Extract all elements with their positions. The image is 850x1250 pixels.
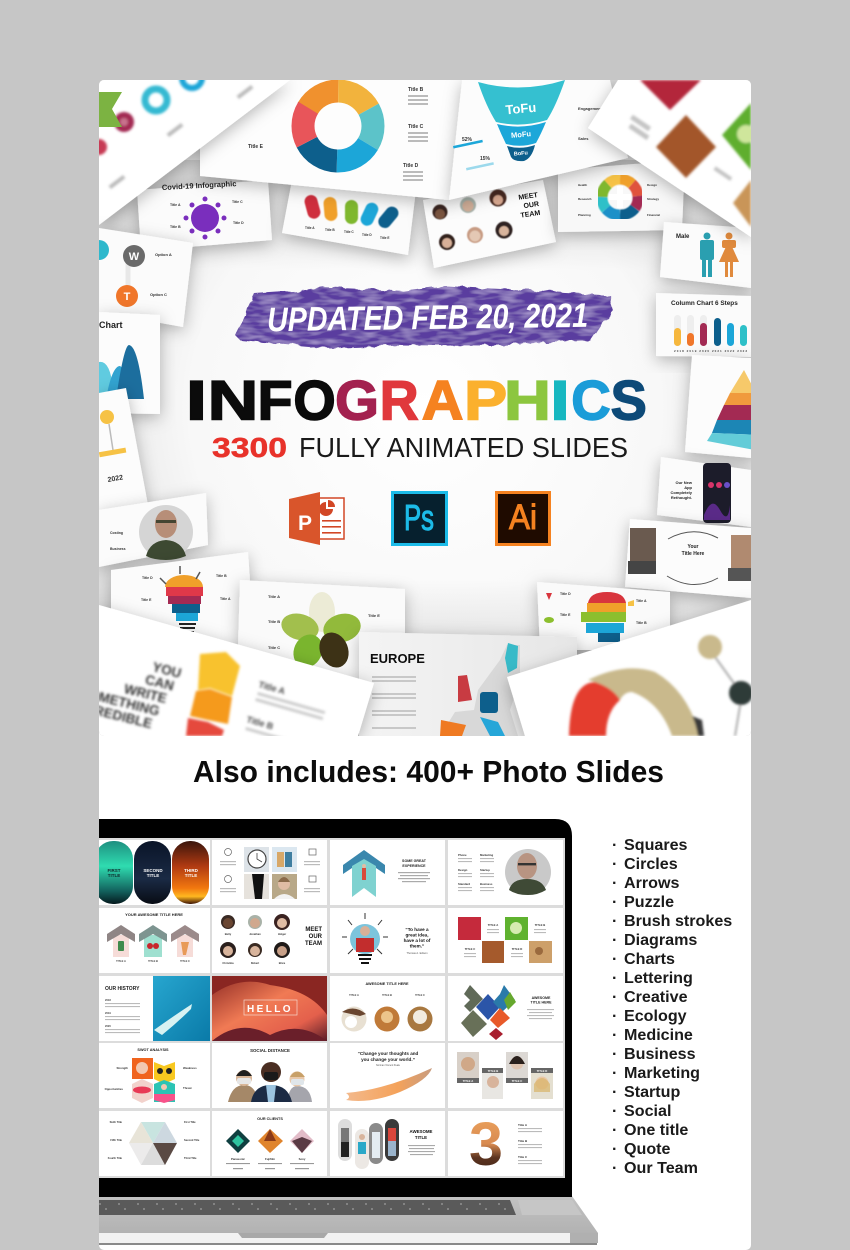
thumbnail: meet our team: Jonathan <box>249 932 261 936</box>
thumbnail: our clients: Sony <box>299 1157 306 1161</box>
thumbnail: four portraits: TITLE C <box>512 1079 522 1083</box>
callout: updated date banner <box>235 286 613 348</box>
slide: funnel: Sales <box>578 136 589 141</box>
feature list: Puzzle <box>624 893 674 911</box>
subheading: slide count <box>212 438 627 458</box>
feature list: · <box>612 836 617 854</box>
thumbnail: hexagon: First Title <box>184 1120 196 1124</box>
thumbnail: idea quote: great idea, <box>406 932 428 938</box>
slide: lightbulb stack: Title B <box>216 574 227 578</box>
feature list: Lettering <box>624 969 693 987</box>
icon: PowerPoint <box>289 492 344 545</box>
icon: Illustrator <box>496 492 550 544</box>
slide: option circles: Option A <box>155 252 172 257</box>
thumbnail: four portraits: TITLE A <box>463 1079 473 1083</box>
slide: funnel: MoFu <box>511 129 532 140</box>
slide: write something incredible: SOMETHING <box>78 684 161 719</box>
thumbnail: our history: 2019 <box>105 1011 111 1015</box>
feature list: Diagrams <box>624 931 697 949</box>
slide: mountain chart <box>99 312 160 414</box>
heading: INFOGRAPHICS: N <box>208 368 258 432</box>
thumbnail: meet our team: Christina <box>222 961 234 965</box>
slide: male female: Male <box>676 234 690 240</box>
thumbnail: arrow photo: SOME GREAT <box>402 859 427 863</box>
slide: write something incredible: CAN <box>144 672 176 694</box>
icon: Photoshop: Ps <box>404 497 434 538</box>
slide: plus wheel: Planning <box>578 213 591 217</box>
heading: INFOGRAPHICS: C <box>571 368 611 432</box>
thumbnail: three pills: TITLE <box>147 873 159 878</box>
slide: head stripes: Title B <box>636 621 647 625</box>
slide: meet our team: TEAM <box>520 210 541 220</box>
slide: plus wheel: Financial <box>647 213 660 217</box>
slide: covid infographic <box>137 179 272 251</box>
slide: colored pills <box>282 180 416 255</box>
thumbnail: portrait with list: Startup <box>480 868 490 872</box>
slide: covid infographic: Title A <box>170 203 181 207</box>
thumbnail: diamond collage <box>448 976 563 1041</box>
slide: green petals: Title B <box>268 619 280 624</box>
thumbnail: idea quote <box>330 908 445 973</box>
slide: option circles: T <box>124 291 131 303</box>
slide: option circles <box>89 228 193 327</box>
page panel <box>99 80 751 1250</box>
subheading: slide count: 3300 <box>212 432 287 463</box>
slide: presenter portrait: Costing <box>110 531 123 535</box>
thumbnail: four portraits <box>448 1043 563 1108</box>
thumbnail: chevron cards: TITLE C <box>180 959 190 963</box>
feature list: · <box>612 1102 617 1120</box>
thumbnail: portrait with list: Business <box>480 882 493 886</box>
thumbnail: swot analysis: Strength <box>116 1066 128 1070</box>
slide: meet our team: OUR <box>523 201 540 210</box>
thumbnail: big number three: Title A <box>518 1123 528 1127</box>
thumbnail: hexagon: Sixth Title <box>110 1120 123 1124</box>
slide: donut cycle: Title E <box>248 144 264 150</box>
slide: colored pills: Title E <box>380 236 390 240</box>
thumbnail: our clients <box>212 1111 327 1176</box>
thumbnail: idea quote: “To have a <box>405 927 429 932</box>
slide: funnel <box>449 80 628 200</box>
slide: funnel: ToFu <box>505 100 537 117</box>
feature list: Social <box>624 1102 671 1120</box>
thumbnail: hello canyon: HELLO <box>247 1004 293 1015</box>
slide: europe map: EUROPE <box>370 651 425 666</box>
slide: write something incredible: WRITE <box>123 681 168 706</box>
slide: green petals <box>237 580 405 680</box>
slide: write something incredible: INCREDIBLE <box>70 697 154 731</box>
feature list: Ecology <box>624 1007 687 1025</box>
icon: people <box>700 232 739 277</box>
icon: Photoshop <box>392 492 446 544</box>
slide: covid infographic: Title D <box>233 221 244 225</box>
heading: INFOGRAPHICS: P <box>464 368 507 432</box>
slide: head stripes: Title D <box>560 592 571 596</box>
thumbnail: meet our team: OUR <box>309 934 323 940</box>
thumbnail: hexagon: Fourth Title <box>108 1156 123 1160</box>
feature list: · <box>612 1159 617 1177</box>
thumbnail: brush quote: Norman Vincent Peale <box>376 1064 401 1067</box>
feature list: Arrows <box>624 874 679 892</box>
thumbnail: food squares: TITLE B <box>535 923 545 927</box>
feature list: · <box>612 931 617 949</box>
thumbnail: people pills <box>330 1111 445 1176</box>
heading: INFOGRAPHICS: O <box>293 368 336 432</box>
slide: covid infographic: Covid-19 Infographic <box>162 179 237 192</box>
thumbnail: people pills: AWESOME <box>410 1129 433 1134</box>
slide: option circles: W <box>129 251 140 263</box>
thumbnail: chevron cards: TITLE B <box>148 959 158 963</box>
thumbnail: four photos <box>212 840 327 905</box>
thumbnail: our history: 2020 <box>105 1024 111 1028</box>
thumbnail: food squares: TITLE D <box>512 947 522 951</box>
thumbnail: our history: 2018 <box>105 998 111 1002</box>
slide: write something incredible: YOU <box>151 659 183 681</box>
thumbnail: people pills: TITLE <box>415 1135 427 1140</box>
slide: plus wheel: Research <box>578 197 592 201</box>
slide: head stripes: Title A <box>636 599 647 603</box>
feature list: Marketing <box>624 1064 700 1082</box>
thumbnail: meet our team: Brice <box>279 961 286 965</box>
feature list: Creative <box>624 988 688 1006</box>
slide: column chart: 2018 2019 2020 2021 2022 2023 <box>674 349 747 353</box>
thumbnail: social distance: SOCIAL DISTANCE <box>250 1048 290 1053</box>
feature list: · <box>612 950 617 968</box>
heading: INFOGRAPHICS: R <box>380 368 419 432</box>
slide: head stripes <box>537 582 670 650</box>
thumbnail: three pills: FIRST <box>108 868 121 873</box>
slide: phone app: Completely <box>670 490 693 495</box>
feature list: · <box>612 988 617 1006</box>
slide: write something incredible: Title B <box>245 714 275 732</box>
thumbnail: hello canyon <box>212 976 327 1041</box>
slide: meet our team <box>423 180 556 268</box>
feature list: Medicine <box>624 1026 693 1044</box>
thumbnail: brush quote: you change your world.” <box>361 1057 415 1062</box>
slide: male female <box>660 222 751 288</box>
thumbnail: food squares <box>448 908 563 973</box>
feature list: · <box>612 1045 617 1063</box>
thumbnail: chevron cards: TITLE A <box>116 959 126 963</box>
slide: phone app <box>657 457 751 527</box>
heading: INFOGRAPHICS: H <box>504 368 551 432</box>
slide: food photo diamonds <box>588 80 755 237</box>
thumbnail: our clients: OUR CLIENTS <box>257 1117 283 1121</box>
thumbnail: portrait with list: Design <box>458 868 468 872</box>
feature list: · <box>612 1007 617 1025</box>
thumbnail: swot analysis: Weakness <box>183 1066 197 1070</box>
feature list: · <box>612 1026 617 1044</box>
feature list: Charts <box>624 950 675 968</box>
thumbnail: swot analysis: Threat <box>183 1086 192 1090</box>
slide: europe map <box>359 632 577 736</box>
thumbnail: idea quote: have a lot of <box>404 938 431 943</box>
slide: column chart: Column Chart 6 Steps <box>671 300 738 307</box>
thumbnail: awesome title circles: TITLE B <box>382 993 392 997</box>
thumbnail: brush quote <box>330 1043 445 1108</box>
slide: option circles: Option C <box>150 292 167 297</box>
thumbnail: arrow photo <box>330 840 445 905</box>
thumbnail: three pills: THIRD <box>184 868 199 873</box>
feature list: · <box>612 874 617 892</box>
slide: colored pills: Title D <box>362 233 372 237</box>
thumbnail: brush quote: “Change your thoughts and <box>358 1051 419 1056</box>
slide: donut cycle: Title B <box>408 87 424 93</box>
laptop base <box>99 1196 598 1245</box>
feature list: Business <box>624 1045 696 1063</box>
laptop mockup <box>99 819 598 1245</box>
thumbnail: our clients: Panasonic <box>231 1157 245 1161</box>
thumbnail: meet our team: TEAM <box>305 941 322 947</box>
thumbnail: awesome title circles: AWESOME TITLE HERE <box>365 982 409 986</box>
chart: map of europe <box>440 643 520 736</box>
feature list: Circles <box>624 855 678 873</box>
slide: covid infographic: Title B <box>170 225 181 229</box>
slide: write something incredible: Title A <box>257 679 287 697</box>
thumbnail: awesome title circles <box>330 976 445 1041</box>
slide: write something incredible <box>99 604 380 736</box>
thumbnail: three pills: TITLE <box>108 873 120 878</box>
slide: colored pills: Title C <box>344 230 354 234</box>
icon: Illustrator: Ai <box>509 498 537 537</box>
feature list: Startup <box>624 1083 680 1101</box>
heading: INFOGRAPHICS: G <box>335 368 379 432</box>
thumbnail: big number three: Title C <box>518 1155 528 1159</box>
feature list: Our Team <box>624 1159 698 1177</box>
thumbnail: idea quote: them.” <box>410 944 424 948</box>
slide: meet our team: MEET <box>518 192 539 202</box>
slide: green petals: Title A <box>268 594 280 599</box>
slide: phone app: Rethought. <box>671 495 692 500</box>
thumbnail: swot analysis <box>99 1043 210 1108</box>
slide: donut cycle: Title D <box>403 163 419 169</box>
slide: column chart <box>656 293 751 357</box>
thumbnail: food squares: TITLE C <box>465 947 475 951</box>
thumbnail: food squares: TITLE A <box>488 923 498 927</box>
feature list: · <box>612 893 617 911</box>
heading: INFOGRAPHICS: I <box>186 368 207 432</box>
thumbnail: our history: OUR HISTORY <box>105 986 140 992</box>
heading: INFOGRAPHICS: I <box>550 368 570 432</box>
slide: funnel: 15% <box>480 156 491 162</box>
slide: phone app: App <box>684 485 693 490</box>
thumbnail: meet our team: Holger <box>278 932 286 936</box>
slide: timeline blurred <box>91 68 290 225</box>
heading: INFOGRAPHICS: A <box>422 368 463 432</box>
slide: colored pills: Title A <box>305 226 315 230</box>
slide: green petals: Title C <box>268 645 280 650</box>
thumbnail: arrow photo: EXPERIENCE <box>402 864 426 868</box>
thumbnail: big number three: 3 <box>469 1110 503 1178</box>
slide: timeline 2022 <box>99 388 148 515</box>
thumbnail: portrait with list: Phone <box>458 853 467 857</box>
feature list: · <box>612 1064 617 1082</box>
feature list: · <box>612 1083 617 1101</box>
slide: funnel: Engagement <box>578 106 603 111</box>
thumbnail: three pills <box>95 840 210 905</box>
feature list: · <box>612 912 617 930</box>
icon: purple virus <box>184 196 226 240</box>
feature list: Squares <box>624 836 688 854</box>
heading: INFOGRAPHICS: S <box>611 368 647 432</box>
slide: half donut <box>507 600 753 736</box>
thumbnail: awesome title circles: TITLE A <box>349 993 359 997</box>
slide: covid infographic: Title C <box>232 200 243 204</box>
thumbnail: diamond collage: TITLE HERE <box>531 1000 552 1004</box>
feature list: One title <box>624 1121 688 1139</box>
thumbnail: four portraits: TITLE D <box>537 1069 547 1073</box>
slide: funnel: 52% <box>462 137 473 143</box>
callout: updated date banner: UPDATED FEB 20, 2021 <box>267 297 588 339</box>
slide: mountain chart: Chart <box>99 320 123 330</box>
slide: plus wheel: Strategy <box>647 197 659 201</box>
thumbnail: meet our team: Betty <box>225 932 232 936</box>
thumbnail: idea quote: Thomas A. Edison <box>406 951 428 955</box>
slide: presenter portrait <box>99 493 208 567</box>
thumbnail: three pills: TITLE <box>185 873 197 878</box>
slide: pyramid <box>685 355 762 458</box>
icon: green ribbon <box>99 92 122 127</box>
thumbnail: social distance <box>212 1043 327 1108</box>
slide: plus wheel: Design <box>647 183 657 187</box>
feature list: · <box>612 1140 617 1158</box>
slide: donut cycle <box>200 80 462 200</box>
slide: your title here <box>625 519 751 598</box>
slide: timeline 2022: 2022 <box>107 474 124 484</box>
slide: lightbulb stack: Title A <box>220 597 231 601</box>
thumbnail: our clients: Fujifilm <box>265 1157 275 1161</box>
feature list: · <box>612 969 617 987</box>
thumbnail: portrait with list: Standard <box>458 882 470 886</box>
feature list: · <box>612 1121 617 1139</box>
thumbnail: hexagon: Second Title <box>184 1138 200 1142</box>
slide: donut cycle: Title C <box>408 124 424 130</box>
thumbnail: diamond collage: AWESOME <box>532 996 551 1000</box>
laptop bezel <box>99 819 572 1197</box>
thumbnail: hexagon: Fifth Title <box>110 1138 123 1142</box>
thumbnail: chevron cards <box>99 908 210 973</box>
thumbnail: swot analysis: Opportunities <box>105 1087 123 1091</box>
slide: lightbulb stack: Title E <box>141 598 152 602</box>
slide: lightbulb stack: Title D <box>142 576 153 580</box>
heading: also includes: Also includes: 400+ Photo Slides <box>193 754 664 789</box>
heading: INFOGRAPHICS: F <box>258 368 293 432</box>
thumbnail: portrait with list <box>448 840 563 905</box>
thumbnail: four portraits: TITLE B <box>488 1069 498 1073</box>
slide: your title here: Your <box>687 544 699 550</box>
thumbnail: chevron cards: YOUR AWESOME TITLE HERE <box>125 912 183 917</box>
hero collage <box>70 68 762 746</box>
slide: green petals: Title E <box>368 613 380 618</box>
feature list <box>612 836 732 1177</box>
slide: head stripes: Title E <box>560 613 571 617</box>
thumbnail: meet our team <box>212 908 327 973</box>
feature list: Quote <box>624 1140 671 1158</box>
slide: funnel: BoFu <box>514 150 528 158</box>
slide: plus wheel: Health <box>578 183 587 187</box>
slide: plus wheel <box>558 160 685 232</box>
thumbnail: meet our team: MEET <box>305 927 322 933</box>
feature list: · <box>612 855 617 873</box>
thumbnail: meet our team: Robert <box>251 961 259 965</box>
slide: phone app: Our New <box>676 480 693 485</box>
thumbnail: big number three <box>448 1110 563 1178</box>
subheading: slide count: FULLY ANIMATED SLIDES <box>299 432 628 463</box>
thumbnail: awesome title circles: TITLE C <box>415 993 425 997</box>
icon: PowerPoint: P <box>298 512 312 535</box>
thumbnail: our history <box>99 976 210 1041</box>
feature list: Brush strokes <box>624 912 732 930</box>
thumbnail: portrait with list: Marketing <box>480 853 494 857</box>
thumbnail: swot analysis: SWOT ANALYSIS <box>137 1048 169 1052</box>
slide: your title here: Title Here <box>682 551 705 557</box>
slide: colored pills: Title B <box>325 228 335 232</box>
thumbnail: big number three: Title B <box>518 1139 528 1143</box>
slide: lightbulb stack <box>102 548 259 644</box>
screen thumbnails <box>95 840 563 1178</box>
thumbnail: hexagon: Third Title <box>184 1156 197 1160</box>
slide: presenter portrait: Business <box>110 547 126 551</box>
thumbnail: hexagon <box>99 1111 210 1176</box>
thumbnail: three pills: SECOND <box>143 868 163 873</box>
